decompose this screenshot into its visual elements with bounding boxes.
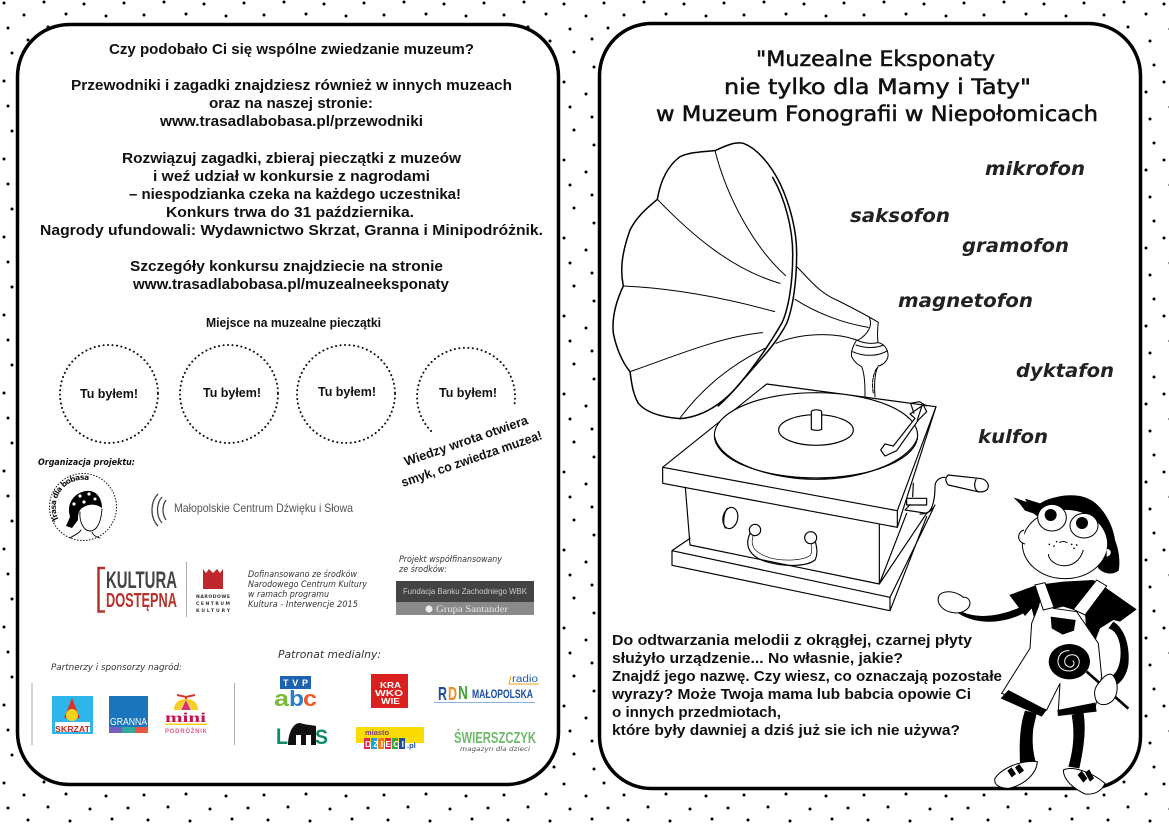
title bbox=[656, 47, 1098, 126]
slogan rotated: Wiedzy wrota otwiera bbox=[402, 412, 531, 469]
logo: TVP ABC: c bbox=[303, 686, 317, 711]
word list: gramofon bbox=[962, 235, 1069, 257]
text: funding note: Dofinansowano ze środków bbox=[248, 569, 357, 580]
label: organisation: Organizacja projektu: bbox=[38, 458, 135, 468]
word list: magnetofon bbox=[898, 290, 1033, 312]
text block: question: służyło urządzenie... No własnie, jakie? bbox=[612, 650, 903, 667]
arm right bbox=[1108, 622, 1129, 685]
logo: TVP ABC: TVP bbox=[283, 678, 308, 688]
logo: Kultura Dostepna: NARODOWE bbox=[196, 594, 230, 600]
title: nie tylko dla Mamy i Taty" bbox=[724, 75, 1031, 99]
logo: Mini Podroznik bbox=[165, 695, 208, 735]
logo: Miasto Dzieci: DZIECI bbox=[365, 739, 404, 749]
illustration: boy with lollipop bbox=[938, 495, 1137, 794]
stamp circles: Tu byłem! bbox=[439, 385, 497, 400]
text block: invitation and contest information: Czy podobało Ci się wspólne zwiedzanie muzeum? bbox=[109, 41, 474, 58]
logo: Radio RDN Malopolska: D bbox=[448, 684, 457, 704]
logo: Fundacja Banku Zachodniego WBK: Grupa Santander bbox=[436, 605, 509, 615]
heading: partners: Partnerzy i sponsorzy nagród: bbox=[51, 662, 182, 673]
logo: Kultura Dostepna: CENTRUM bbox=[196, 601, 231, 607]
logo: Kultura Dostepna: KULTURA bbox=[106, 567, 177, 594]
face bbox=[1048, 542, 1083, 566]
logo: Lyms: L bbox=[276, 724, 288, 749]
logo: Fundacja Banku Zachodniego WBK: ze środków: bbox=[398, 564, 447, 575]
logo: Trasa dla bobasa: Trasa dla bobasa bbox=[52, 476, 89, 522]
logo: Malopolskie Centrum bbox=[152, 494, 353, 526]
heading: media patrons: Patronat medialny: bbox=[278, 649, 381, 661]
shoes bbox=[995, 761, 1037, 788]
stamp circles: Tu byłem! bbox=[80, 386, 138, 401]
text block: question: które były dawniej a dziś już sie ich nie używa? bbox=[612, 722, 960, 739]
logo: TVP ABC: a bbox=[274, 686, 290, 711]
logo: Miasto Dzieci: miasto bbox=[365, 730, 389, 737]
eyes bbox=[1038, 504, 1066, 531]
slogan rotated: smyk, co zwiedza muzea! bbox=[399, 427, 544, 490]
logo: Miasto Dzieci: .pl bbox=[407, 741, 416, 750]
text block: invitation and contest information: Nagrody ufundowali: Wydawnictwo Skrzat, Granna i Minipodróżnik. bbox=[40, 222, 543, 239]
arm left bbox=[958, 607, 1023, 622]
logo: Kultura Dostepna: DOSTĘPNA bbox=[106, 590, 177, 612]
word list: saksofon bbox=[850, 205, 950, 227]
logo: Krakowie: WIE bbox=[381, 696, 400, 706]
text block: invitation and contest information: www.trasadlabobasa.pl/przewodniki bbox=[159, 113, 423, 130]
logo: Skrzat bbox=[52, 696, 93, 734]
panel: left card bbox=[16, 22, 560, 786]
word list bbox=[850, 158, 1114, 448]
logo: Fundacja Banku Zachodniego WBK: Projekt współfinansowany bbox=[399, 554, 503, 565]
logo: Radio RDN Malopolska: N bbox=[458, 683, 468, 703]
text block: invitation and contest information: www.trasadlabobasa.pl/muzealneeksponaty bbox=[132, 276, 450, 293]
logo: Miasto Dzieci bbox=[356, 727, 424, 750]
logo: Granna bbox=[109, 696, 148, 733]
logo: Kultura Dostepna: KULTURY bbox=[196, 608, 231, 614]
text block: question: wyrazy? Może Twoja mama lub babcia opowie Ci bbox=[611, 686, 971, 703]
logo: Mini Podroznik: mini bbox=[165, 711, 206, 726]
text block: invitation and contest information: Przewodniki i zagadki znajdziesz również w innych muzeach bbox=[71, 77, 512, 94]
panel: right card bbox=[600, 24, 1140, 794]
stamp circles: Tu byłem! bbox=[203, 385, 261, 400]
logo: Krakowie: WKO bbox=[375, 688, 404, 698]
logo: Swierszczyk: magazyn dla dzieci bbox=[460, 745, 530, 753]
illustration: gramophone bbox=[613, 143, 988, 611]
text: funding note: Kultura - Interwencje 2015 bbox=[248, 600, 358, 610]
turntable box bbox=[663, 384, 988, 611]
media logos bbox=[274, 674, 539, 753]
logo: Krakowie: KRA bbox=[380, 680, 401, 690]
shirt bbox=[1009, 580, 1137, 642]
text: funding note: Narodowego Centrum Kultury bbox=[248, 580, 368, 590]
logo: Swierszczyk: ŚWIERSZCZYK bbox=[454, 728, 536, 747]
text block: question: Do odtwarzania melodii z okrągłej, czarnej płyty bbox=[612, 632, 973, 649]
text block: invitation and contest information: i weź udział w konkursie z nagrodami bbox=[153, 168, 430, 185]
text: funding note: w ramach programu bbox=[248, 590, 329, 600]
stamp circles bbox=[60, 345, 515, 443]
text block: invitation and contest information bbox=[40, 41, 543, 293]
logo: Fundacja Banku Zachodniego WBK bbox=[396, 554, 534, 615]
text block: invitation and contest information: – niespodzianka czeka na każdego uczestnika! bbox=[129, 186, 461, 203]
text block: question: o innych przedmiotach, bbox=[612, 704, 781, 721]
title: "Muzealne Eksponaty bbox=[756, 47, 995, 71]
logo: Fundacja Banku Zachodniego WBK: Fundacja Banku Zachodniego WBK bbox=[403, 587, 528, 596]
logo: Kultura Dostepna bbox=[98, 562, 231, 617]
logo: Granna: GRANNA bbox=[110, 717, 147, 728]
word list: dyktafon bbox=[1016, 360, 1114, 382]
logo: Trasa dla bobasa bbox=[49, 473, 117, 541]
logo: Krakowie bbox=[371, 674, 408, 708]
text block: invitation and contest information: Szczegóły konkursu znajdziecie na stronie bbox=[130, 258, 443, 275]
heading: stamps place: Miejsce na muzealne pieczątki bbox=[206, 315, 381, 330]
logo: Lyms bbox=[276, 723, 328, 749]
logo: Skrzat: SKRZAT bbox=[55, 725, 90, 734]
logo: Radio RDN Malopolska: R bbox=[438, 684, 447, 704]
text block: invitation and contest information: Konkurs trwa do 31 października. bbox=[166, 204, 414, 221]
logo: Radio RDN Malopolska: radio bbox=[512, 674, 538, 685]
logo: TVP ABC: b bbox=[289, 686, 304, 711]
stamp circles: Tu byłem! bbox=[318, 384, 376, 399]
text: funding note bbox=[248, 569, 368, 610]
logo: Swierszczyk bbox=[454, 728, 536, 753]
overalls bbox=[1002, 600, 1102, 711]
text block: question bbox=[611, 632, 1002, 739]
title: w Muzeum Fonografii w Niepołomicach bbox=[656, 102, 1098, 126]
hand bbox=[1095, 674, 1117, 705]
logo: Mini Podroznik: PODRÓŻNIK bbox=[165, 727, 208, 735]
word list: mikrofon bbox=[985, 158, 1085, 180]
word list: kulfon bbox=[978, 426, 1048, 448]
partner logos bbox=[32, 683, 235, 745]
cap and hair bbox=[1013, 495, 1119, 574]
horn bbox=[613, 143, 888, 419]
legs bbox=[1020, 711, 1037, 763]
text block: invitation and contest information: oraz na naszej stronie: bbox=[209, 95, 373, 112]
head bbox=[1022, 509, 1108, 579]
lollipop bbox=[1087, 672, 1128, 709]
logo: Lyms: S bbox=[315, 726, 328, 749]
logo: TVP ABC bbox=[274, 676, 317, 711]
text block: invitation and contest information: Rozwiązuj zagadki, zbieraj pieczątki z muzeów bbox=[122, 150, 461, 167]
text block: question: Znajdź jego nazwę. Czy wiesz, co oznaczają pozostałe bbox=[612, 668, 1002, 685]
logo: Radio RDN Malopolska: MAŁOPOLSKA bbox=[472, 687, 533, 701]
logo: Malopolskie Centrum: Małopolskie Centrum Dźwięku i Słowa bbox=[174, 501, 353, 515]
logo: Radio RDN Malopolska bbox=[434, 674, 539, 704]
